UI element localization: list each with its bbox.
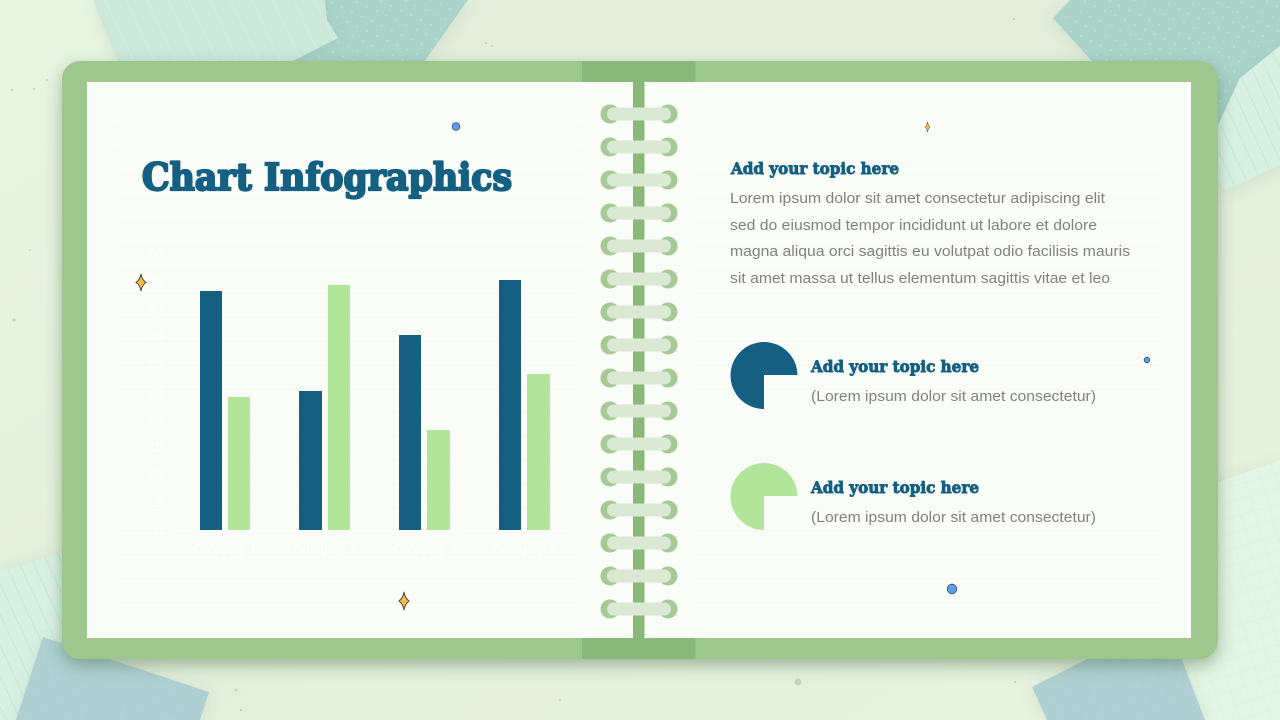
x axis line bbox=[170, 530, 575, 531]
y axis labels: 45 bbox=[149, 273, 163, 288]
spine strip bbox=[633, 82, 644, 638]
y axis labels: 10 bbox=[149, 467, 163, 482]
description: (Lorem ipsum dolor sit amet consectetur) bbox=[811, 388, 1096, 405]
y axis labels: 25 bbox=[149, 384, 163, 399]
category labels: Category 4 bbox=[492, 541, 556, 556]
y axis labels: 40 bbox=[149, 301, 163, 316]
heading: Add your topic here bbox=[810, 478, 979, 497]
y axis labels: 15 bbox=[149, 439, 163, 454]
decorative blue dots bbox=[452, 123, 1150, 594]
title: Chart Infographics bbox=[142, 155, 512, 199]
spine band: top bbox=[582, 61, 696, 82]
paper specks bbox=[11, 18, 1016, 711]
series 2 bars bbox=[228, 285, 550, 530]
icon: light pie bbox=[731, 463, 798, 530]
heading: Add your topic here bbox=[810, 357, 979, 376]
body: sed do eiusmod tempor incididunt ut labore et dolore bbox=[730, 217, 1097, 234]
series 1 bars bbox=[200, 280, 521, 530]
spine band: bottom bbox=[582, 638, 696, 659]
decorative gold sparkles bbox=[136, 122, 930, 610]
bar chart bbox=[149, 245, 575, 556]
y axis labels: 20 bbox=[149, 412, 163, 427]
body: magna aliqua orci sagittis eu volutpat odio facilisis mauris bbox=[730, 243, 1130, 260]
item: topic 2 bbox=[731, 342, 1096, 409]
item: topic 3 bbox=[731, 463, 1096, 530]
y axis labels bbox=[149, 245, 163, 538]
y axis labels: 35 bbox=[149, 328, 163, 343]
y axis labels: 5 bbox=[156, 495, 163, 510]
y axis labels: 30 bbox=[149, 356, 163, 371]
text block: main topic bbox=[730, 159, 1130, 287]
icon: dark pie bbox=[731, 342, 798, 409]
heading: Add your topic here bbox=[730, 159, 899, 178]
body: sit amet massa ut tellus elementum sagittis vitae et leo bbox=[730, 270, 1110, 287]
notebook cover bbox=[62, 61, 1218, 659]
y axis labels: 50 bbox=[149, 245, 163, 260]
category labels: Category 1 bbox=[193, 541, 257, 556]
y axis labels: 0 bbox=[156, 523, 163, 538]
spiral binding bbox=[600, 104, 678, 618]
category labels bbox=[193, 541, 556, 556]
category labels: Category 2 bbox=[293, 541, 357, 556]
ruled lines: left page bbox=[115, 127, 582, 603]
notebook pages bbox=[87, 82, 1191, 638]
description: (Lorem ipsum dolor sit amet consectetur) bbox=[811, 509, 1096, 526]
body bbox=[730, 190, 1130, 287]
body: Lorem ipsum dolor sit amet consectetur adipiscing elit bbox=[730, 190, 1106, 207]
category labels: Category 3 bbox=[393, 541, 457, 556]
ruled lines: right page bbox=[696, 127, 1160, 603]
